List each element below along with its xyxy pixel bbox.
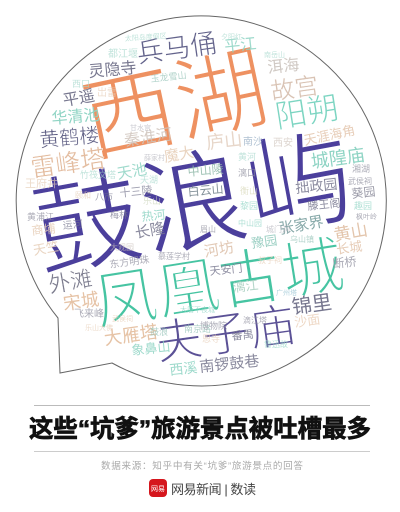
secondary words: 象鼻山 — [131, 339, 171, 358]
secondary words: 天安门 — [209, 261, 243, 278]
small words: 大观园 — [110, 242, 134, 252]
secondary words: 豫园 — [250, 232, 278, 251]
word: 张家界: 张家界 — [278, 213, 325, 238]
small words: 恩寺 — [202, 334, 220, 344]
secondary words: 热河 — [141, 208, 166, 224]
word: 平遥: 平遥 — [62, 87, 96, 110]
small words: 夕阳红 — [221, 32, 242, 41]
secondary words: 河坊 — [203, 239, 235, 261]
source note: 数据来源：知乎中有关“坑爹”旅游景点的回答 — [101, 460, 303, 472]
small words: 天湖 — [140, 175, 158, 185]
secondary words: 长隆 — [134, 220, 166, 242]
secondary words: 天竺 — [32, 239, 60, 258]
small words: 中山园 — [238, 218, 262, 228]
small words: 滴江塔 — [243, 315, 267, 325]
word: 凤凰古城: 凤凰古城 — [89, 230, 349, 339]
word: 城隍庙: 城隍庙 — [310, 145, 366, 172]
title: 这些“坑爹”旅游景点被吐槽最多 — [29, 415, 371, 443]
logo: NetEase News Shudu — [149, 479, 256, 497]
word: 雷峰塔: 雷峰塔 — [29, 145, 107, 183]
small words: 黎园 — [240, 200, 258, 211]
small words: 博物院 — [200, 320, 227, 331]
small words: 飞来峰 — [74, 308, 104, 320]
word: 故宫: 故宫 — [269, 73, 320, 106]
secondary words — [31, 35, 376, 378]
small words: 枫叶岭 — [356, 212, 377, 221]
word: 华清池: 华清池 — [51, 106, 100, 128]
secondary words: 庐山 — [205, 129, 243, 153]
secondary words: 平江 — [224, 35, 257, 56]
secondary words: 长城 — [335, 238, 363, 257]
secondary words: 天池 — [116, 161, 148, 183]
word: 夫子庙: 夫子庙 — [152, 298, 299, 370]
small words: 薛家村 — [144, 153, 165, 162]
icon: red app badge: 网易 — [151, 485, 165, 493]
small words: 颐和 — [75, 191, 91, 200]
secondary words: 番禺 — [231, 328, 254, 343]
small words: 东方明珠 — [109, 253, 150, 271]
small words: 黄河 — [238, 151, 256, 162]
small words: 岀雷 — [97, 86, 117, 99]
secondary words: 商埔 — [31, 221, 56, 238]
small words: 眉山 — [200, 224, 216, 234]
speech bubble outline — [16, 16, 386, 386]
small words: 都江堰 — [108, 48, 138, 60]
small words: 慕莲学村 — [158, 251, 190, 261]
secondary words: 葵园 — [351, 185, 376, 201]
secondary words: 断桥 — [332, 254, 357, 271]
secondary words: 拙政园 — [295, 176, 338, 196]
secondary words: 洱海 — [267, 56, 300, 77]
small words: 鲁迅故 — [264, 339, 288, 349]
small words: 城门洞 — [266, 224, 290, 234]
small words: 竹筏文塔 — [80, 169, 116, 180]
small words: 大唐不夜城 — [180, 305, 215, 314]
small words: 太阳岛度假区 — [125, 31, 167, 43]
small words: 衡山 — [240, 185, 258, 196]
small words: 武侯祠 — [348, 176, 372, 186]
word: 锦里: 锦里 — [290, 291, 333, 319]
small words: 湘湖 — [352, 163, 370, 174]
word: 兵马俑: 兵马俑 — [135, 28, 219, 69]
word: 黄鹤楼: 黄鹤楼 — [38, 124, 100, 152]
small words: 西口 — [72, 79, 90, 89]
small words: 十三陵 — [119, 183, 153, 200]
word: 灵隐寺: 灵隐寺 — [88, 59, 137, 81]
small words: 漓口 — [238, 167, 256, 178]
small words: 南沙 — [243, 135, 263, 148]
small words: 乐山大佛 — [85, 323, 113, 332]
secondary words: 漓江 — [232, 277, 259, 295]
word: 南锣鼓巷: 南锣鼓巷 — [199, 353, 260, 376]
small words: 武侯祠 — [112, 314, 133, 323]
word: 宋城: 宋城 — [62, 289, 100, 314]
small words: 乐山 — [143, 195, 161, 206]
small words: 趣园 — [354, 200, 372, 211]
secondary words: 沙面 — [293, 311, 321, 330]
small words: 王府井 — [25, 176, 58, 190]
secondary words: 西溪 — [169, 359, 198, 378]
secondary words: 天涯海角 — [303, 122, 357, 148]
word: 鼓浪屿: 鼓浪屿 — [23, 115, 364, 293]
small words: 甘水宫 — [130, 123, 151, 132]
small words: 黄浦江 — [27, 211, 54, 222]
small words: 广州塔 — [276, 288, 297, 297]
small words: 鼓浪 — [150, 326, 168, 337]
small words: 乌山镇 — [290, 234, 314, 244]
secondary words: 中山陵 — [187, 161, 224, 179]
small words: 玉龙雪山 — [150, 69, 187, 84]
small words — [25, 31, 377, 349]
secondary words: 滕王阁 — [307, 196, 341, 213]
rule above title — [34, 404, 370, 406]
word: 大雁塔: 大雁塔 — [103, 322, 159, 349]
secondary words: 魔大 — [163, 144, 195, 166]
word: 西湖: 西湖 — [74, 35, 277, 176]
secondary words: 秦淮河 — [123, 125, 173, 150]
word cloud — [23, 28, 377, 378]
small words: 叔子祠 — [258, 255, 282, 265]
small words: 八市 — [95, 191, 113, 202]
word: 阳朔: 阳朔 — [272, 89, 341, 135]
brand name: 网易新闻 | 数读 — [171, 482, 256, 497]
small words: 西安 — [273, 136, 293, 149]
word: 外滩: 外滩 — [47, 266, 94, 298]
word: 黄山: 黄山 — [332, 220, 369, 245]
small words: 南岳山 — [264, 50, 285, 59]
secondary words: 白云山 — [187, 181, 224, 199]
small words: 梅林 — [110, 209, 128, 220]
small words: 南京路 — [184, 323, 211, 334]
small words: 运河 — [62, 218, 83, 232]
rule below title — [34, 450, 370, 452]
